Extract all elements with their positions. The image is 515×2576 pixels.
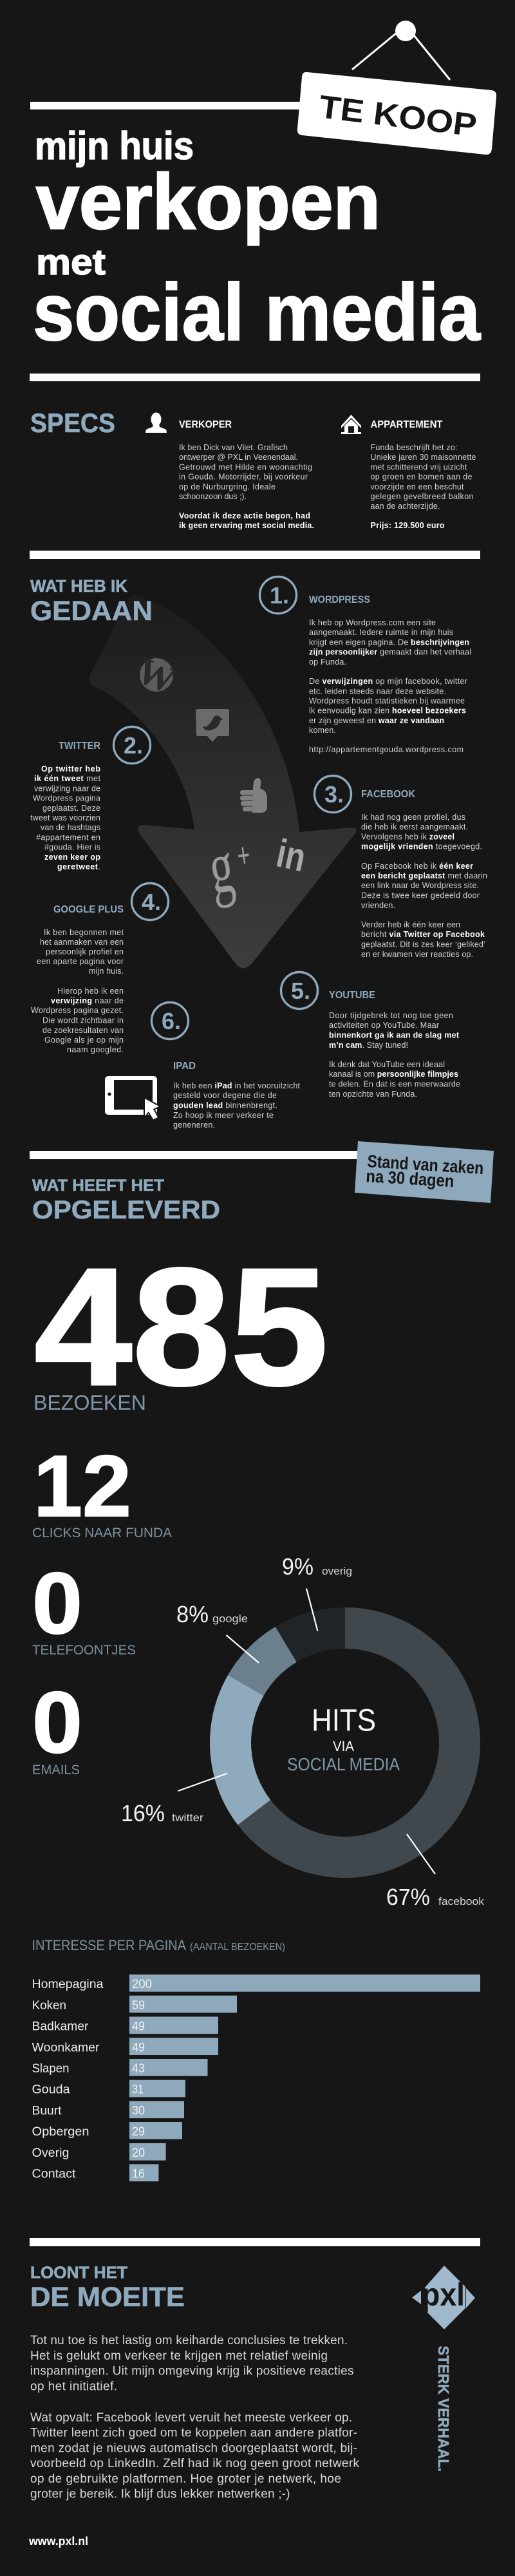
stat: 0 emails: 0 — [32, 1674, 82, 1771]
text: youtube: Ik denk dat YouTube een ideaal — [329, 1060, 445, 1069]
number badge 2: 2. — [124, 732, 143, 759]
heading: interesse per pagina — [32, 1937, 285, 1953]
heading: twitter: TWITTER — [59, 741, 100, 752]
stat: 12 clicks naar funda — [32, 1437, 172, 1540]
heading: wat heb ik gedaan: GEDAAN — [30, 596, 153, 627]
text: twitter: geretweet. — [57, 862, 100, 871]
step 1: wordpress — [260, 577, 471, 754]
segment: twitter 16% — [210, 1675, 270, 1825]
appartement text: APPARTEMENT — [371, 419, 443, 430]
text: twitter: geplaatst. Deze — [42, 804, 100, 813]
row: gouda: Gouda — [32, 2083, 70, 2097]
icon: house — [341, 415, 361, 434]
heading: wat heeft het opgeleverd — [32, 1177, 220, 1224]
icon: linkedin: in — [273, 831, 310, 880]
text: google plus — [31, 928, 124, 1054]
verkoper text: ik geen ervaring met social media. — [179, 521, 314, 530]
text: twitter: verwijzing naar de — [34, 784, 100, 793]
text: facebook: een link naar de Wordpress site. — [361, 881, 479, 890]
row: woonkamer — [32, 2038, 218, 2055]
number badge 4 — [131, 884, 169, 920]
callout: stand van zaken — [355, 1141, 494, 1203]
verkoper text: schoonzoon dus ;). — [179, 492, 247, 501]
icon: pxl logo — [412, 2266, 475, 2329]
heading: ipad: IPAD — [173, 1061, 196, 1072]
text: wordpress: etc. leiden steeds naar deze website. — [309, 687, 446, 696]
donut centre label: HITS — [312, 1704, 376, 1738]
icon: hanging te koop sign — [297, 21, 496, 155]
text: google plus: Ik ben begonnen met — [44, 928, 124, 937]
text: conclusie: op het initiatief. — [30, 2380, 117, 2393]
donut centre label — [287, 1704, 400, 1774]
row: overig: Overig — [32, 2146, 70, 2160]
row: opbergen — [32, 2122, 182, 2139]
row: contact: Contact — [32, 2168, 76, 2181]
row: homepagina: Homepagina — [32, 1978, 104, 1991]
step 3: facebook — [314, 775, 487, 959]
text: twitter: #gouda. Hier is — [44, 842, 100, 851]
label: google — [176, 1601, 248, 1627]
text: facebook: Verder heb ik één keer een — [361, 920, 460, 929]
text: wordpress: er zijn geweest en waar ze vandaan — [309, 716, 444, 725]
row: badkamer: 49 — [132, 2020, 145, 2034]
panel: specs — [30, 408, 476, 530]
text: youtube: binnenkort ga ik aan de slag met — [329, 1030, 460, 1039]
text: wordpress — [309, 618, 471, 754]
row: badkamer: Badkamer — [32, 2020, 89, 2034]
text: youtube: ten opzichte van Funda. — [329, 1090, 417, 1099]
text: conclusie: Twitter leent zich goed om te koppelen aan andere platfor- — [30, 2427, 357, 2439]
row: koken — [32, 1996, 237, 2012]
text: twitter: tweet was voorzien — [30, 813, 100, 822]
text: wordpress: http://appartementgouda.wordpress.com — [309, 745, 464, 754]
number badge 2 — [113, 726, 151, 764]
icon: google plus: g — [204, 823, 252, 910]
text: wordpress: ik eenvoudig kan zien hoeveel bezoekers — [309, 706, 466, 715]
row: homepagina: 200 — [132, 1978, 152, 1991]
text: wordpress: komen. — [309, 726, 336, 735]
text: facebook: Deze is twee keer gedeeld door — [361, 891, 480, 900]
text: google plus: Google als je op mijn — [44, 1036, 124, 1045]
title: social media — [33, 268, 481, 357]
donut centre label: VIA — [333, 1738, 354, 1754]
heading: loont het de moeite: DE MOEITE — [30, 2282, 185, 2313]
text: youtube: m’n cam. Stay tuned! — [329, 1041, 408, 1050]
text: facebook — [361, 813, 487, 959]
icon: person — [145, 412, 167, 433]
label: facebook — [386, 1884, 485, 1910]
text: conclusie: voorbeeld op LinkedIn. Zelf had ik nog geen groot netwerk — [30, 2457, 359, 2470]
label: google: 8% — [176, 1601, 209, 1627]
label: overig — [282, 1553, 352, 1580]
text: wordpress: De verwijzingen op mijn facebook, twitter — [309, 677, 467, 686]
heading: facebook: FACEBOOK — [361, 789, 415, 800]
leader lines — [178, 1588, 435, 1874]
text: google plus: Hierop heb ik een — [57, 987, 124, 996]
icon: google plus: + — [234, 835, 253, 876]
row: koken: 59 — [132, 1999, 145, 2012]
icon: wordpress: W — [131, 649, 182, 701]
label: facebook: 67% — [386, 1884, 430, 1910]
stat: 0 emails: EMAILS — [32, 1763, 80, 1777]
text: twitter: Wordpress pagina — [33, 793, 100, 802]
title: verkopen — [36, 158, 380, 245]
text: google plus: naam googled. — [67, 1045, 124, 1054]
row: gouda — [32, 2080, 185, 2097]
step 4: google plus — [31, 884, 169, 1054]
text: google plus: de zoekresultaten van — [42, 1026, 124, 1035]
number badge 3: 3. — [324, 781, 344, 808]
text: conclusie: inspanningen. Uit mijn omgeving krijg ik positieve reacties — [30, 2365, 354, 2378]
row: slapen: 43 — [132, 2062, 145, 2076]
text: facebook: Ik had nog geen profiel, dus — [361, 813, 465, 822]
callout: stand van zaken: na 30 dagen — [366, 1166, 454, 1191]
text: youtube: kanaal is om persoonlijke filmpjes — [329, 1070, 458, 1079]
verkoper text: Voordat ik deze actie begon, had — [179, 511, 310, 520]
icon: ipad with cursor — [105, 1076, 159, 1119]
text: facebook: geplaatst. Dit is zes keer ‘geliked’ — [361, 940, 485, 949]
text: conclusie — [30, 2334, 359, 2501]
text: wordpress: Wordpress houdt statistieken bij waarmee — [309, 697, 465, 706]
heading: wat heb ik gedaan — [30, 576, 153, 627]
stat: 12 clicks naar funda: 12 — [33, 1437, 131, 1535]
text: google plus: verwijzing naar de — [51, 996, 124, 1005]
text: website: www.pxl.nl — [28, 2535, 88, 2548]
text: conclusie: groter je bereik. Ik blijf dus lekker netwerken ;-) — [30, 2487, 290, 2501]
title — [33, 124, 481, 357]
number badge 1 — [260, 577, 296, 613]
text: wordpress: aangemaakt. Iedere ruimte in mijn huis — [309, 628, 453, 637]
row: slapen: Slapen — [32, 2062, 70, 2076]
text: twitter: zeven keer op — [44, 853, 100, 862]
donut centre label: SOCIAL MEDIA — [287, 1754, 400, 1774]
text: wordpress: op Funda. — [309, 658, 346, 667]
row: contact: 16 — [132, 2168, 145, 2181]
row: badkamer — [32, 2017, 218, 2034]
verkoper text: Ik ben Dick van Vliet. Grafisch — [179, 443, 288, 452]
stat: 485 bezoeken: BEZOEKEN — [33, 1391, 146, 1414]
text: facebook: vrienden. — [361, 901, 395, 910]
row: buurt: 30 — [132, 2105, 145, 2117]
text: conclusie: Wat opvalt: Facebook levert veruit het meeste verkeer op. — [30, 2411, 352, 2425]
verkoper text: in Gouda. Motorrijder, bij voorkeur — [179, 473, 308, 482]
text: facebook: een bericht geplaatst met daarin — [361, 871, 487, 880]
heading: loont het de moeite — [30, 2263, 185, 2313]
row: koken: Koken — [32, 1999, 66, 2012]
stat: 0 telefoontjes: 0 — [32, 1555, 82, 1652]
heading: wat heeft het opgeleverd: WAT HEEFT HET — [32, 1177, 164, 1195]
stat: 0 telefoontjes: TELEFOONTJES — [32, 1643, 136, 1658]
stat: 485 bezoeken: 485 — [34, 1234, 328, 1421]
stat: 0 telefoontjes — [32, 1555, 136, 1658]
text: google plus: het aanmaken van een — [40, 938, 124, 947]
step 2: twitter — [30, 726, 151, 871]
stat: 12 clicks naar funda: CLICKS NAAR FUNDA — [32, 1526, 172, 1540]
segment: facebook 67% — [238, 1607, 480, 1878]
text: sterk verhaal: STERK VERHAAL. — [435, 2345, 452, 2472]
row: slapen — [32, 2059, 207, 2076]
heading: wat heeft het opgeleverd: OPGELEVERD — [32, 1196, 220, 1224]
icon: twitter bubble — [196, 709, 229, 742]
row: buurt: Buurt — [32, 2105, 62, 2117]
appartement text: op groen en bomen aan de — [371, 473, 473, 482]
text: youtube — [329, 1011, 460, 1099]
text: twitter — [30, 764, 101, 871]
heading: wat heb ik gedaan: WAT HEB IK — [30, 576, 127, 596]
bar chart: interesse per pagina — [32, 1975, 480, 2181]
text: conclusie: men zodat je nieuws automatisch doorgeplaatst wordt, bij- — [30, 2442, 357, 2455]
callout: stand van zaken: Stand van zaken — [367, 1151, 484, 1178]
heading: google plus: GOOGLE PLUS — [53, 904, 124, 915]
text: conclusie: Tot nu toe is het lastig om keiharde conclusies te trekken. — [30, 2334, 348, 2347]
row: opbergen: 29 — [132, 2125, 145, 2139]
text: facebook: en er kwamen vier reacties op. — [361, 950, 473, 959]
row: opbergen: Opbergen — [32, 2125, 89, 2139]
appartement text: met schitterend vrij uizicht — [371, 462, 467, 471]
number badge 4: 4. — [142, 889, 161, 915]
text: facebook: mogelijk vrienden toegevoegd. — [361, 842, 482, 851]
step 5: youtube — [281, 972, 460, 1099]
appartement text: Unieke jaren 30 maisonnette — [371, 453, 476, 462]
text: twitter: van de hashtags — [41, 823, 100, 832]
row: woonkamer: Woonkamer — [32, 2041, 100, 2054]
icon: thumbs up — [240, 778, 267, 813]
label: twitter: twitter — [172, 1812, 203, 1824]
label: twitter: 16% — [121, 1800, 165, 1826]
text: wordpress: zijn persoonlijker gemaakt dan het verhaal — [309, 648, 471, 657]
text: youtube: Door tijdgebrek tot nog toe geen — [329, 1011, 453, 1020]
appartement text: Funda beschrijft het zo: — [371, 443, 457, 452]
title: mijn huis — [35, 124, 194, 167]
number badge 1: 1. — [270, 582, 289, 609]
text: youtube: activiteiten op YouTube. Maar — [329, 1021, 439, 1030]
row: gouda: 31 — [132, 2083, 144, 2097]
label: overig: overig — [322, 1565, 352, 1577]
row: homepagina — [32, 1975, 480, 1992]
appartement text: voorzijde en een beschut — [371, 482, 464, 491]
label: facebook: facebook — [438, 1895, 485, 1908]
header rule — [30, 102, 301, 109]
text: facebook: die heb ik eerst aangemaakt. — [361, 822, 468, 831]
row: woonkamer: 49 — [132, 2041, 145, 2054]
text: wordpress: krijgt een eigen pagina. De beschrijvingen — [309, 638, 469, 647]
verkoper text — [179, 419, 314, 530]
heading: interesse per pagina: INTERESSE PER PAGINA — [32, 1937, 186, 1953]
number badge 5 — [281, 972, 318, 1009]
text: wordpress: Ik heb op Wordpress.com een site — [309, 618, 436, 627]
row: contact — [32, 2164, 158, 2181]
icon: hanging te koop sign: TE KOOP — [317, 88, 479, 144]
segment: overig 9% — [276, 1607, 345, 1662]
text: youtube: te delen. En dat is een meerwaarde — [329, 1079, 460, 1088]
text: facebook: Op Facebook heb ik één keer — [361, 862, 473, 871]
row: buurt — [32, 2101, 184, 2118]
text: ipad: Ik heb een iPad in het vooruitzicht — [173, 1081, 301, 1090]
segment: google 8% — [228, 1627, 297, 1696]
text: ipad — [173, 1081, 301, 1130]
verkoper text: Getrouwd met Hilde en woonachtig — [179, 462, 312, 471]
label: google: google — [212, 1613, 248, 1625]
text: ipad: geneneren. — [173, 1121, 215, 1130]
number badge 5: 5. — [291, 978, 310, 1004]
donut chart: hits via social media — [121, 1553, 485, 1910]
appartement text — [371, 419, 476, 530]
row: overig: 20 — [132, 2146, 145, 2160]
verkoper text: op de Nurburgring. Ideale — [179, 482, 276, 491]
heading: interesse per pagina: (AANTAL BEZOEKEN) — [190, 1942, 285, 1953]
text: twitter: Op twitter heb — [41, 764, 100, 773]
verkoper text: VERKOPER — [179, 419, 232, 430]
text: conclusie: Het is gelukt om verkeer te krijgen met relatief weinig — [30, 2349, 328, 2363]
appartement text: aan de achterzijde. — [371, 502, 440, 511]
heading: youtube: YOUTUBE — [329, 990, 375, 1001]
heading: specs: SPECS — [30, 408, 115, 438]
text: facebook: bericht via Twitter op Facebook — [361, 930, 485, 939]
text: google plus: persoonlijk profiel en — [46, 947, 124, 956]
row: overig — [32, 2143, 166, 2161]
arrow: curved background arrow — [89, 595, 356, 969]
text: ipad: gouden lead binnenbrengt. — [173, 1101, 277, 1110]
heading: loont het de moeite: LOONT HET — [30, 2263, 127, 2282]
text: google plus: mijn huis. — [89, 967, 124, 976]
appartement text: Prijs: 129.500 euro — [371, 521, 445, 530]
text: conclusie: op de gebruikte platformen. Hoe groter je netwerk, hoe — [30, 2472, 341, 2486]
number badge 6: 6. — [162, 1008, 181, 1034]
label: twitter — [121, 1800, 203, 1826]
text: ipad: Zo hoop ik meer verkeer te — [173, 1111, 274, 1120]
text: ipad: gesteld voor degene die de — [173, 1091, 277, 1100]
text: google plus: Die wordt zichtbaar in — [42, 1016, 124, 1025]
number badge 3 — [314, 775, 351, 813]
number badge 6 — [152, 1002, 188, 1039]
heading: wordpress: WORDPRESS — [309, 594, 370, 605]
step 6: ipad — [105, 1002, 301, 1130]
text: twitter: ik één tweet met — [34, 774, 101, 783]
title: met — [36, 242, 106, 282]
text: google plus: een aparte pagina voor — [37, 957, 124, 966]
text: google plus: Wordpress pagina gezet. — [31, 1006, 124, 1015]
appartement text: gelegen gevelbreed balkon — [371, 492, 474, 501]
icon: pxl logo: pxl — [422, 2277, 465, 2313]
label: overig: 9% — [282, 1553, 314, 1580]
text: twitter: #appartement en — [36, 833, 100, 842]
verkoper text: ontwerper @ PXL in Veenendaal. — [179, 453, 298, 462]
text: facebook: Vervolgens heb ik zoveel — [361, 832, 454, 841]
